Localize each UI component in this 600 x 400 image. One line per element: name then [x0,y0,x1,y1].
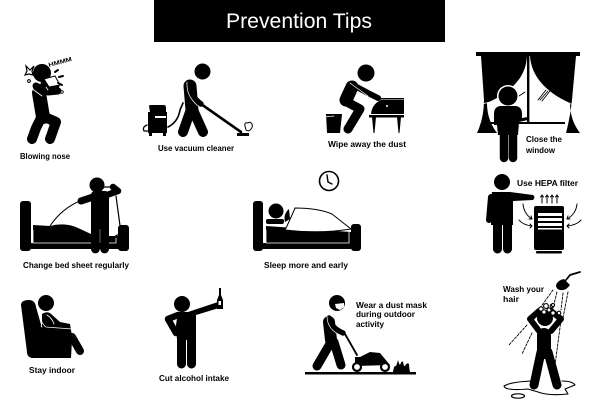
panel: close the window: window [525,146,556,155]
caption: wipe: Wipe away the dust [328,140,406,149]
panel: dust mask outdoor: activity [356,320,385,329]
title banner: Prevention Tips [226,10,372,33]
caption: close window: Close the [526,135,563,144]
panel: sleep early [253,172,361,270]
panel: blowing nose [20,57,73,161]
caption: alcohol: Cut alcohol intake [159,374,230,383]
panel: wash hair [503,272,580,398]
caption: vacuum: Use vacuum cleaner [158,144,234,153]
title banner [154,0,445,42]
panel: close the window [476,52,580,158]
panel: dust mask outdoor [305,295,428,374]
panel: vacuum cleaner [143,64,252,153]
panel: cut alcohol [159,288,230,383]
icon: clock [320,172,338,190]
caption: indoor: Stay indoor [29,366,75,375]
caption: wash hair: Wash your [503,285,544,294]
sneeze sound: HMMM [48,57,73,69]
panel: wash hair: hair [503,295,519,304]
caption: dust mask: Wear a dust mask [356,301,428,310]
panel: stay indoor [21,295,80,375]
caption: bed sheet: Change bed sheet regularly [23,261,130,270]
panel: wipe dust [324,64,406,149]
panel: HEPA filter [489,174,581,254]
panel: change bed sheet [20,178,130,270]
caption: blowing nose: Blowing nose [20,152,71,161]
panel: dust mask outdoor: during outdoor [356,310,415,319]
caption: sleep: Sleep more and early [264,261,349,270]
caption: HEPA: Use HEPA filter [517,179,578,188]
